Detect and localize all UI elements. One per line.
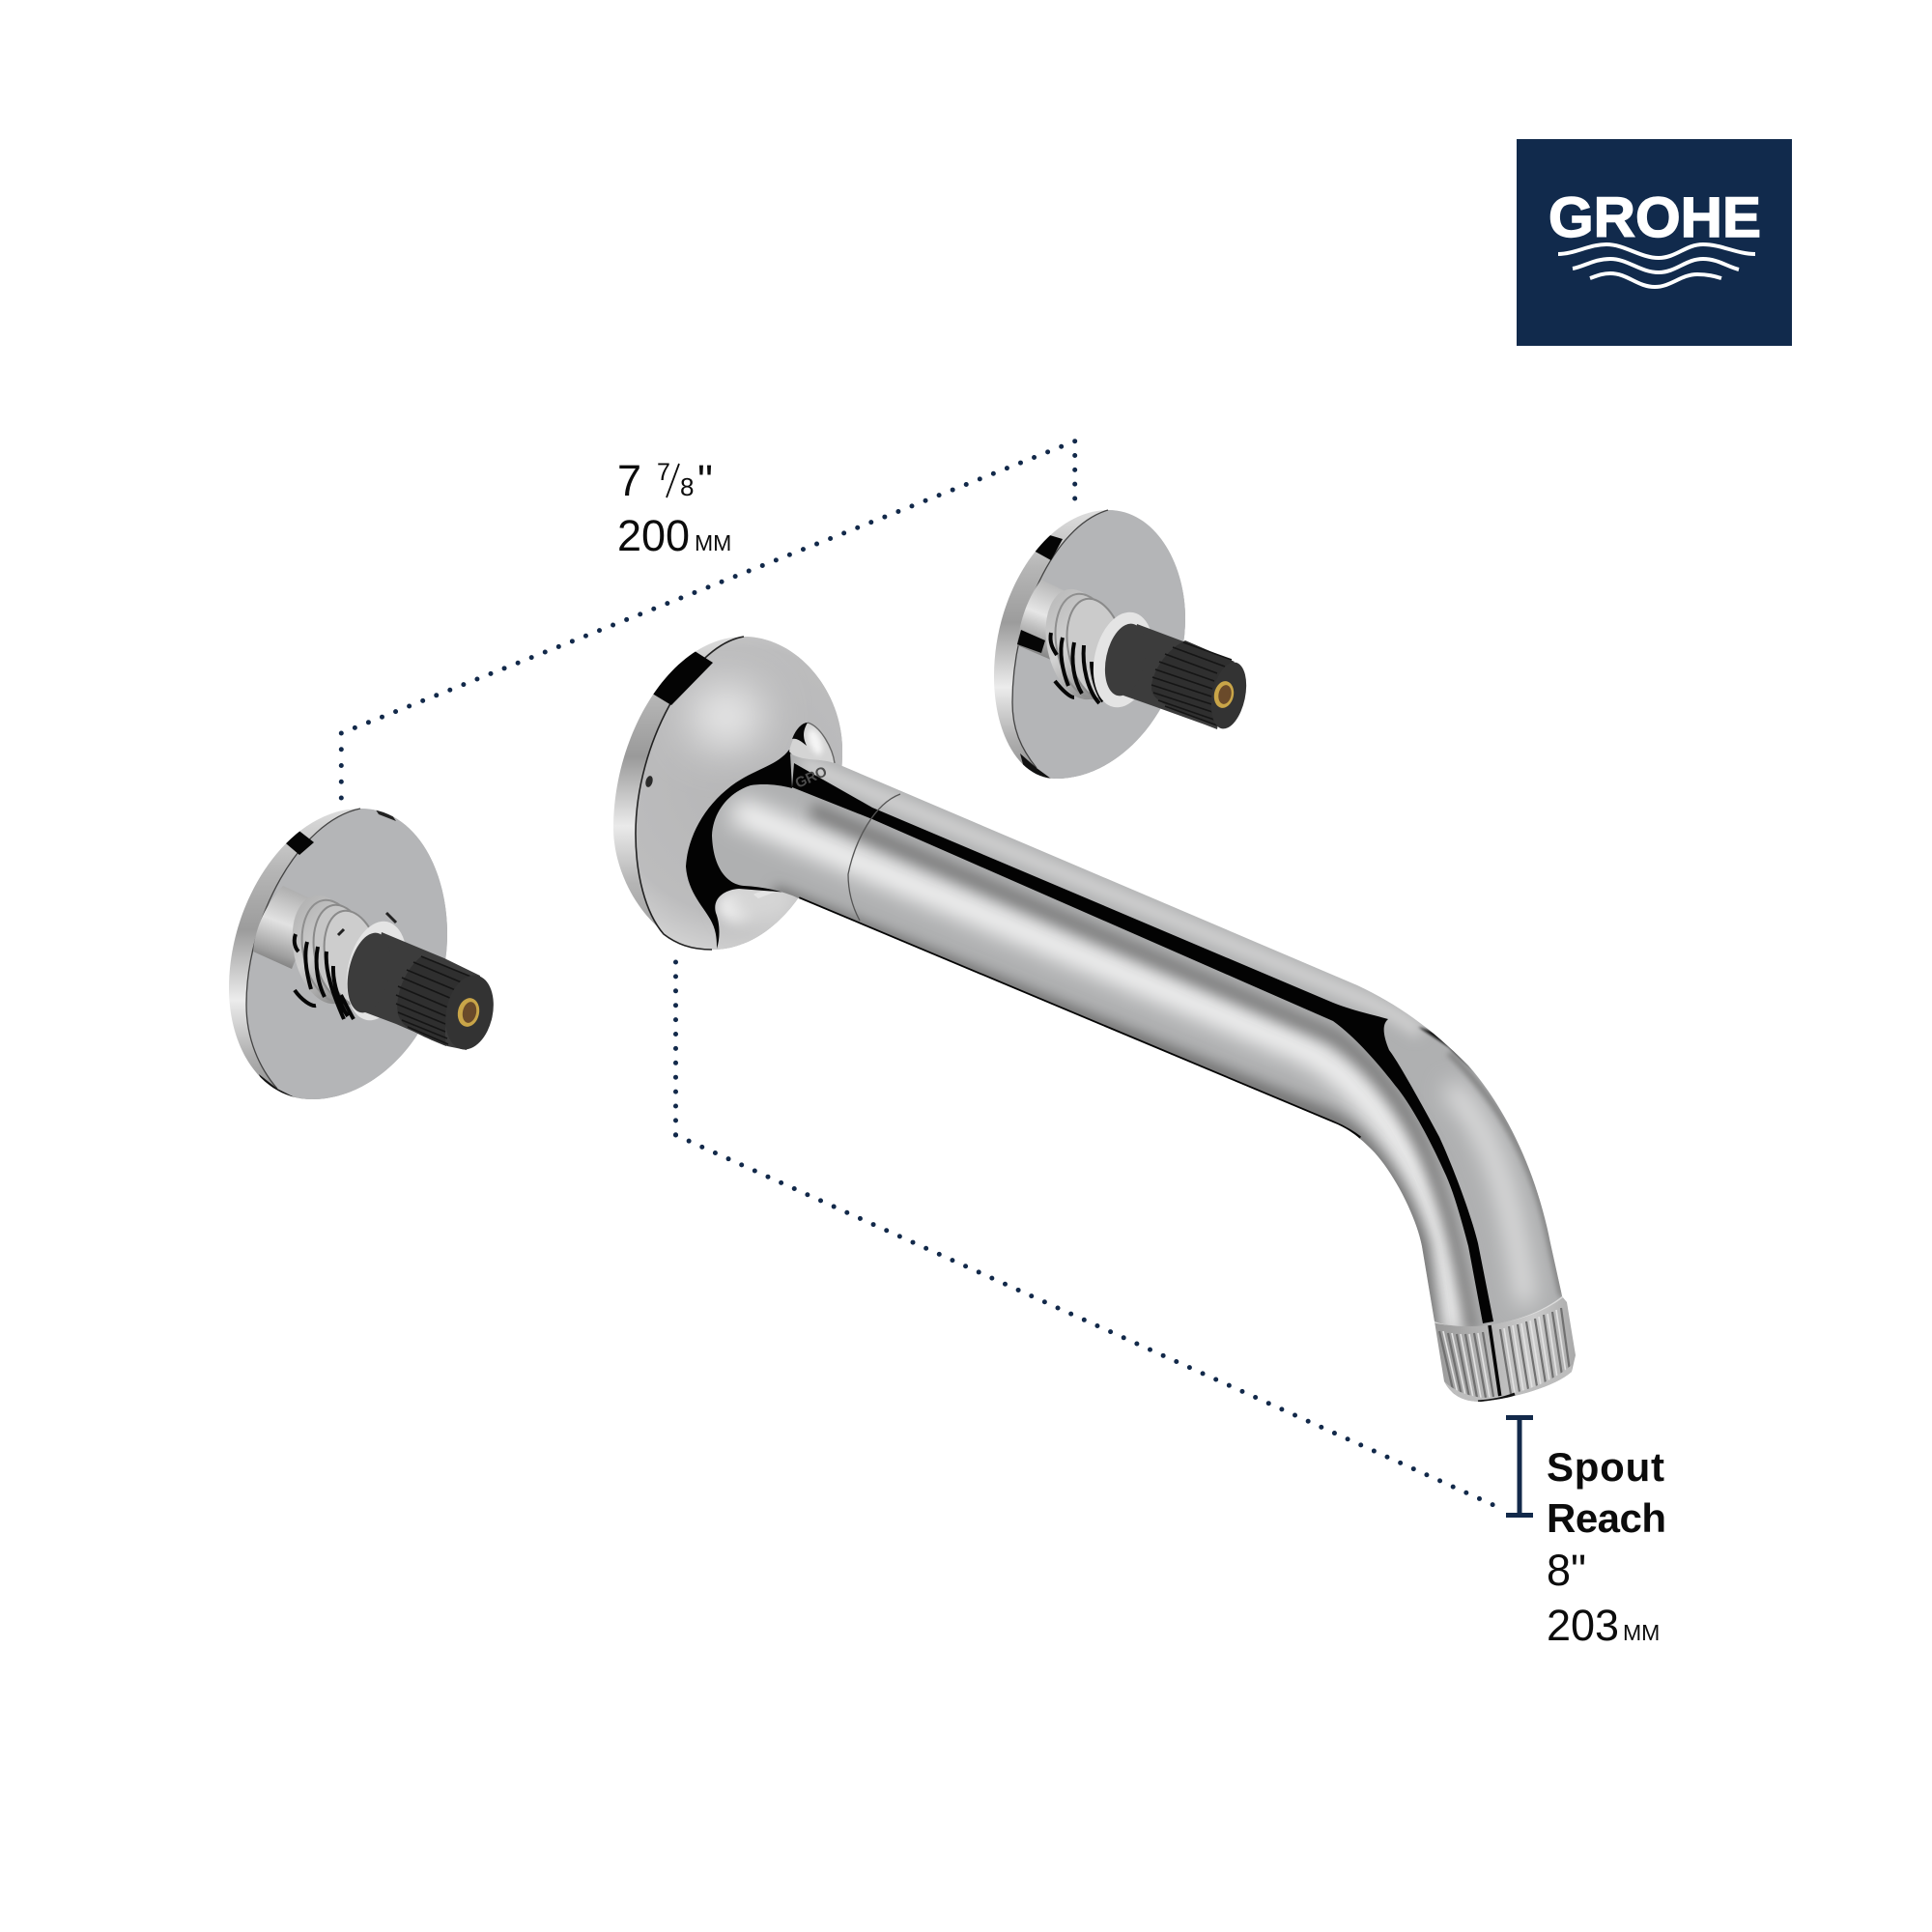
left chrome base (253, 886, 319, 969)
main spout faucet (613, 637, 1594, 1406)
dimension text: 7 7/8 inch 200 mm: MM (695, 530, 731, 555)
left plate (229, 804, 447, 1106)
right plate (994, 510, 1185, 784)
spout reach label: 8" (1547, 1546, 1586, 1595)
dimension line: handle spread (341, 441, 1075, 798)
dimension text: 7 7/8 inch 200 mm: " (697, 456, 713, 505)
engraved brand on neck: GRO (793, 763, 830, 792)
left black stem (341, 929, 500, 1054)
outer bend highlight (1449, 1087, 1526, 1304)
left handle valve (229, 804, 500, 1106)
dimension text: 7 7/8 inch 200 mm: 8 (680, 472, 694, 501)
wall plate (613, 637, 842, 956)
black neck reflection (686, 750, 850, 949)
knurled aerator collar (1435, 1296, 1576, 1402)
left threaded collar (283, 889, 396, 1019)
spout reach label: MM (1623, 1620, 1660, 1645)
spout reach label: 203 (1547, 1601, 1619, 1650)
black reflection stripe (792, 763, 1493, 1323)
spout reach label: Spout (1547, 1444, 1664, 1490)
right black stem (1099, 620, 1252, 732)
upper neck lobe (789, 723, 842, 769)
outer edge shade (1449, 1053, 1562, 1296)
right chrome base (1017, 580, 1077, 660)
left white washer (338, 916, 415, 1026)
right threaded collar (1037, 582, 1134, 706)
dimension line: spout reach (676, 962, 1493, 1505)
lower lobe highlight (734, 810, 1459, 1333)
spout reach label (1547, 1444, 1666, 1650)
shading near inner edge (773, 894, 1430, 1333)
outer bend sliver (1418, 1027, 1475, 1072)
tube seam (848, 794, 900, 921)
lower lobe sliver (753, 891, 776, 898)
top band highlight (802, 763, 1420, 1032)
dimension text: 7 7/8 inch 200 mm: 200 (617, 511, 690, 560)
dimension text: 7 7/8 inch 200 mm: 7 (657, 459, 670, 486)
shading under stripe (811, 810, 1473, 1333)
right white washer (1085, 607, 1162, 713)
dimension text: 7 7/8 inch 200 mm: 7 (617, 456, 641, 505)
dimension text: 7 7/8 inch 200 mm (617, 456, 731, 560)
logo: GROHE: GROHE (1548, 186, 1761, 249)
spout tube (712, 753, 1563, 1326)
logo: GROHE (1517, 139, 1792, 346)
right handle valve (994, 510, 1252, 784)
bottom edge line (799, 898, 1360, 1138)
icon: reach I-beam marker (1506, 1415, 1533, 1518)
spout reach label: Reach (1547, 1495, 1666, 1541)
